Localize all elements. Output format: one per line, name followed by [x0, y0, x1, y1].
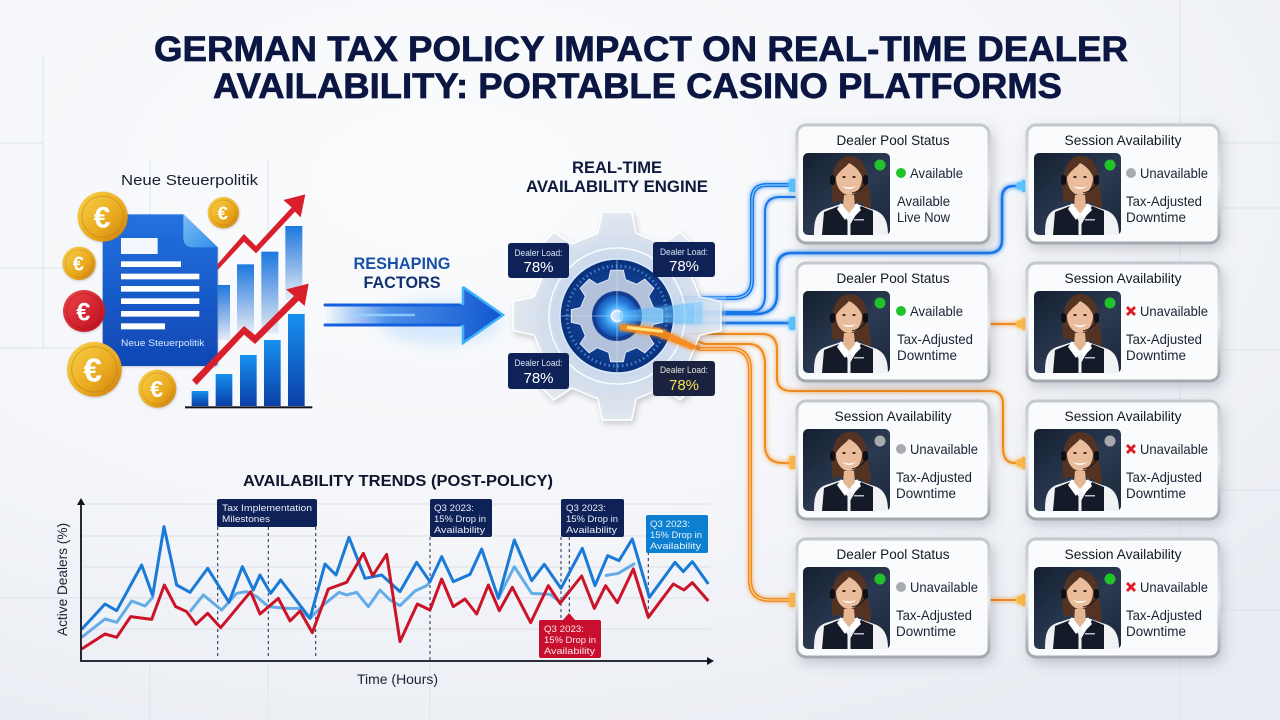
status note	[896, 607, 972, 639]
card: session availability, row 3 right: Session Availability	[1064, 408, 1182, 424]
euro coins	[62, 192, 239, 408]
series: light blue	[82, 563, 635, 637]
status note: Downtime	[896, 485, 956, 501]
status note	[1126, 331, 1202, 363]
heading: Neue Steuerpolitik: Neue Steuerpolitik	[121, 172, 259, 189]
status note: Tax-Adjusted	[1126, 331, 1202, 347]
callout: Q3 2023 drop, second: Availability	[566, 525, 617, 536]
callout: Q3 2023 drop, first	[430, 499, 492, 537]
euro coins: €	[217, 202, 228, 223]
status note: Live Now	[897, 209, 951, 225]
status note	[1126, 607, 1202, 639]
status note: Downtime	[1126, 485, 1186, 501]
card: dealer pool status, row 2: Dealer Pool Status	[836, 270, 950, 286]
status: unavailable with red cross: Unavailable	[1140, 441, 1208, 457]
badge: dealer load top right: Dealer Load:	[660, 247, 708, 257]
status: unavailable with red cross: Unavailable	[1140, 303, 1208, 319]
badge: dealer load top left: Dealer Load:	[514, 248, 562, 258]
card: session availability, row 3 left: Session Availability	[834, 408, 952, 424]
label: reshaping factors: FACTORS	[364, 273, 440, 292]
callout: Q3 2023 drop, red: Availability	[544, 646, 595, 657]
axes	[81, 501, 710, 661]
callout: Q3 2023 drop, red: Q3 2023:	[544, 624, 584, 635]
status note: Tax-Adjusted	[896, 469, 972, 485]
card: session availability, row 1: Session Availability	[1064, 132, 1182, 148]
status note: Downtime	[897, 347, 957, 363]
label: reshaping factors	[354, 254, 450, 292]
card: session availability, row 4	[1027, 539, 1219, 657]
card: dealer pool status, row 4: Dealer Pool Status	[836, 546, 950, 562]
dealer photo	[1034, 153, 1121, 235]
callout: Q3 2023 drop, light blue: 15% Drop in	[650, 530, 702, 541]
dealer photo	[1034, 429, 1121, 511]
title: GERMAN TAX POLICY IMPACT ON REAL-TIME DEALER	[154, 30, 1128, 69]
connectors: orange lines from engine to cards	[650, 324, 1026, 600]
dealer photo	[1034, 291, 1121, 373]
badge: dealer load top right: 78%	[669, 258, 699, 275]
euro coins: €	[150, 376, 163, 402]
arrow: reshaping factors into engine	[324, 287, 503, 344]
badge: dealer load bottom left: Dealer Load:	[514, 358, 562, 368]
milestone markers	[218, 527, 648, 660]
card: dealer pool status, row 1	[797, 125, 989, 243]
callout: Q3 2023 drop, second: 15% Drop in	[566, 514, 618, 525]
heading: real-time availability engine: AVAILABILITY ENGINE	[526, 178, 708, 196]
badge: dealer load bottom left: 78%	[523, 370, 554, 387]
status note	[897, 331, 973, 363]
card: dealer pool status, row 4	[797, 539, 989, 657]
euro coins: €	[76, 298, 90, 326]
document: Neue Steuerpolitik	[121, 338, 205, 348]
callout: Q3 2023 drop, red	[539, 613, 601, 658]
status note: Tax-Adjusted	[897, 331, 973, 347]
icon: engine gear	[513, 212, 725, 420]
badge: dealer load bottom right	[653, 361, 715, 396]
card: dealer pool status, row 1: Dealer Pool Status	[836, 132, 950, 148]
back red arrow	[218, 194, 305, 270]
card: dealer pool status, row 2	[797, 263, 989, 381]
status note: Tax-Adjusted	[1126, 469, 1202, 485]
callout: Q3 2023 drop, second	[561, 499, 624, 537]
series: red	[82, 553, 708, 649]
status note	[896, 469, 972, 501]
dealer photo	[1034, 567, 1121, 649]
connectors: blue lines from engine to cards	[660, 185, 1026, 323]
callout: Q3 2023 drop, light blue: Availability	[650, 541, 701, 552]
chart title: AVAILABILITY TRENDS (POST-POLICY)	[243, 473, 553, 490]
badge: dealer load top left	[508, 243, 569, 278]
document	[103, 214, 218, 366]
status note: Downtime	[1126, 623, 1186, 639]
status note	[1126, 193, 1202, 225]
callout: Q3 2023 drop, light blue: Q3 2023:	[650, 519, 690, 530]
heading: real-time availability engine: REAL-TIME	[572, 159, 662, 177]
card: session availability, row 2: Session Availability	[1064, 270, 1182, 286]
dark disc	[560, 259, 674, 373]
status: available: Available	[910, 303, 963, 319]
title	[154, 30, 1128, 106]
status note: Available	[897, 193, 950, 209]
callout: Q3 2023 drop, second: Q3 2023:	[566, 503, 606, 514]
euro coins: €	[83, 352, 102, 389]
card: session availability, row 2	[1027, 263, 1219, 381]
card: session availability, row 4: Session Availability	[1064, 546, 1182, 562]
callout: Q3 2023 drop, light blue	[646, 515, 708, 553]
dealer photo	[803, 429, 890, 511]
outer gear	[513, 212, 721, 420]
status note: Downtime	[1126, 209, 1186, 225]
badge: dealer load top right	[653, 242, 715, 277]
callout: tax implementation milestones	[217, 499, 317, 527]
status: unavailable with red cross: Unavailable	[1140, 579, 1208, 595]
status note: Downtime	[1126, 347, 1186, 363]
label: reshaping factors: RESHAPING	[354, 254, 450, 273]
back bar chart	[218, 226, 302, 340]
status: unavailable: Unavailable	[910, 441, 978, 457]
title: AVAILABILITY: PORTABLE CASINO PLATFORMS	[213, 67, 1062, 106]
badge: dealer load bottom right: Dealer Load:	[660, 365, 708, 375]
axis label: active dealers: Active Dealers (%)	[54, 523, 70, 636]
status note: Tax-Adjusted	[1126, 193, 1202, 209]
heading: real-time availability engine	[526, 159, 708, 196]
callout: tax implementation milestones: Milestones	[222, 514, 270, 525]
dealer photo	[803, 567, 890, 649]
energy beams	[620, 302, 702, 324]
badge: dealer load bottom right: 78%	[669, 377, 699, 394]
front bar chart	[192, 314, 305, 406]
callout: Q3 2023 drop, first: Q3 2023:	[434, 503, 474, 514]
badge: dealer load top left: 78%	[523, 259, 554, 276]
callout: Q3 2023 drop, red: 15% Drop in	[544, 635, 596, 646]
callout: Q3 2023 drop, first: Availability	[434, 525, 485, 536]
status note	[1126, 469, 1202, 501]
callout: tax implementation milestones: Tax Implementation	[222, 503, 312, 514]
card: session availability, row 3 right	[1027, 401, 1219, 519]
axis label: time: Time (Hours)	[357, 671, 438, 687]
status: unavailable: Unavailable	[910, 579, 978, 595]
dealer photo	[803, 291, 890, 373]
status note: Downtime	[896, 623, 956, 639]
status note	[897, 193, 951, 225]
card: session availability, row 3 left	[797, 401, 989, 519]
callout: Q3 2023 drop, first: 15% Drop in	[434, 514, 486, 525]
front red arrow	[192, 284, 309, 385]
euro coins: €	[94, 202, 111, 235]
line chart: availability trends	[77, 498, 714, 665]
status note: Tax-Adjusted	[896, 607, 972, 623]
card: session availability, row 1	[1027, 125, 1219, 243]
icon: tax policy document with coins and rising charts	[62, 192, 312, 408]
dealer photo	[803, 153, 890, 235]
series: blue	[82, 527, 708, 629]
status note: Tax-Adjusted	[1126, 607, 1202, 623]
badge: dealer load bottom left	[508, 353, 569, 389]
connector nodes	[789, 179, 1026, 607]
inner gear	[571, 270, 663, 362]
status: unavailable: Unavailable	[1140, 165, 1208, 181]
euro coins: €	[73, 254, 84, 276]
status: available: Available	[910, 165, 963, 181]
